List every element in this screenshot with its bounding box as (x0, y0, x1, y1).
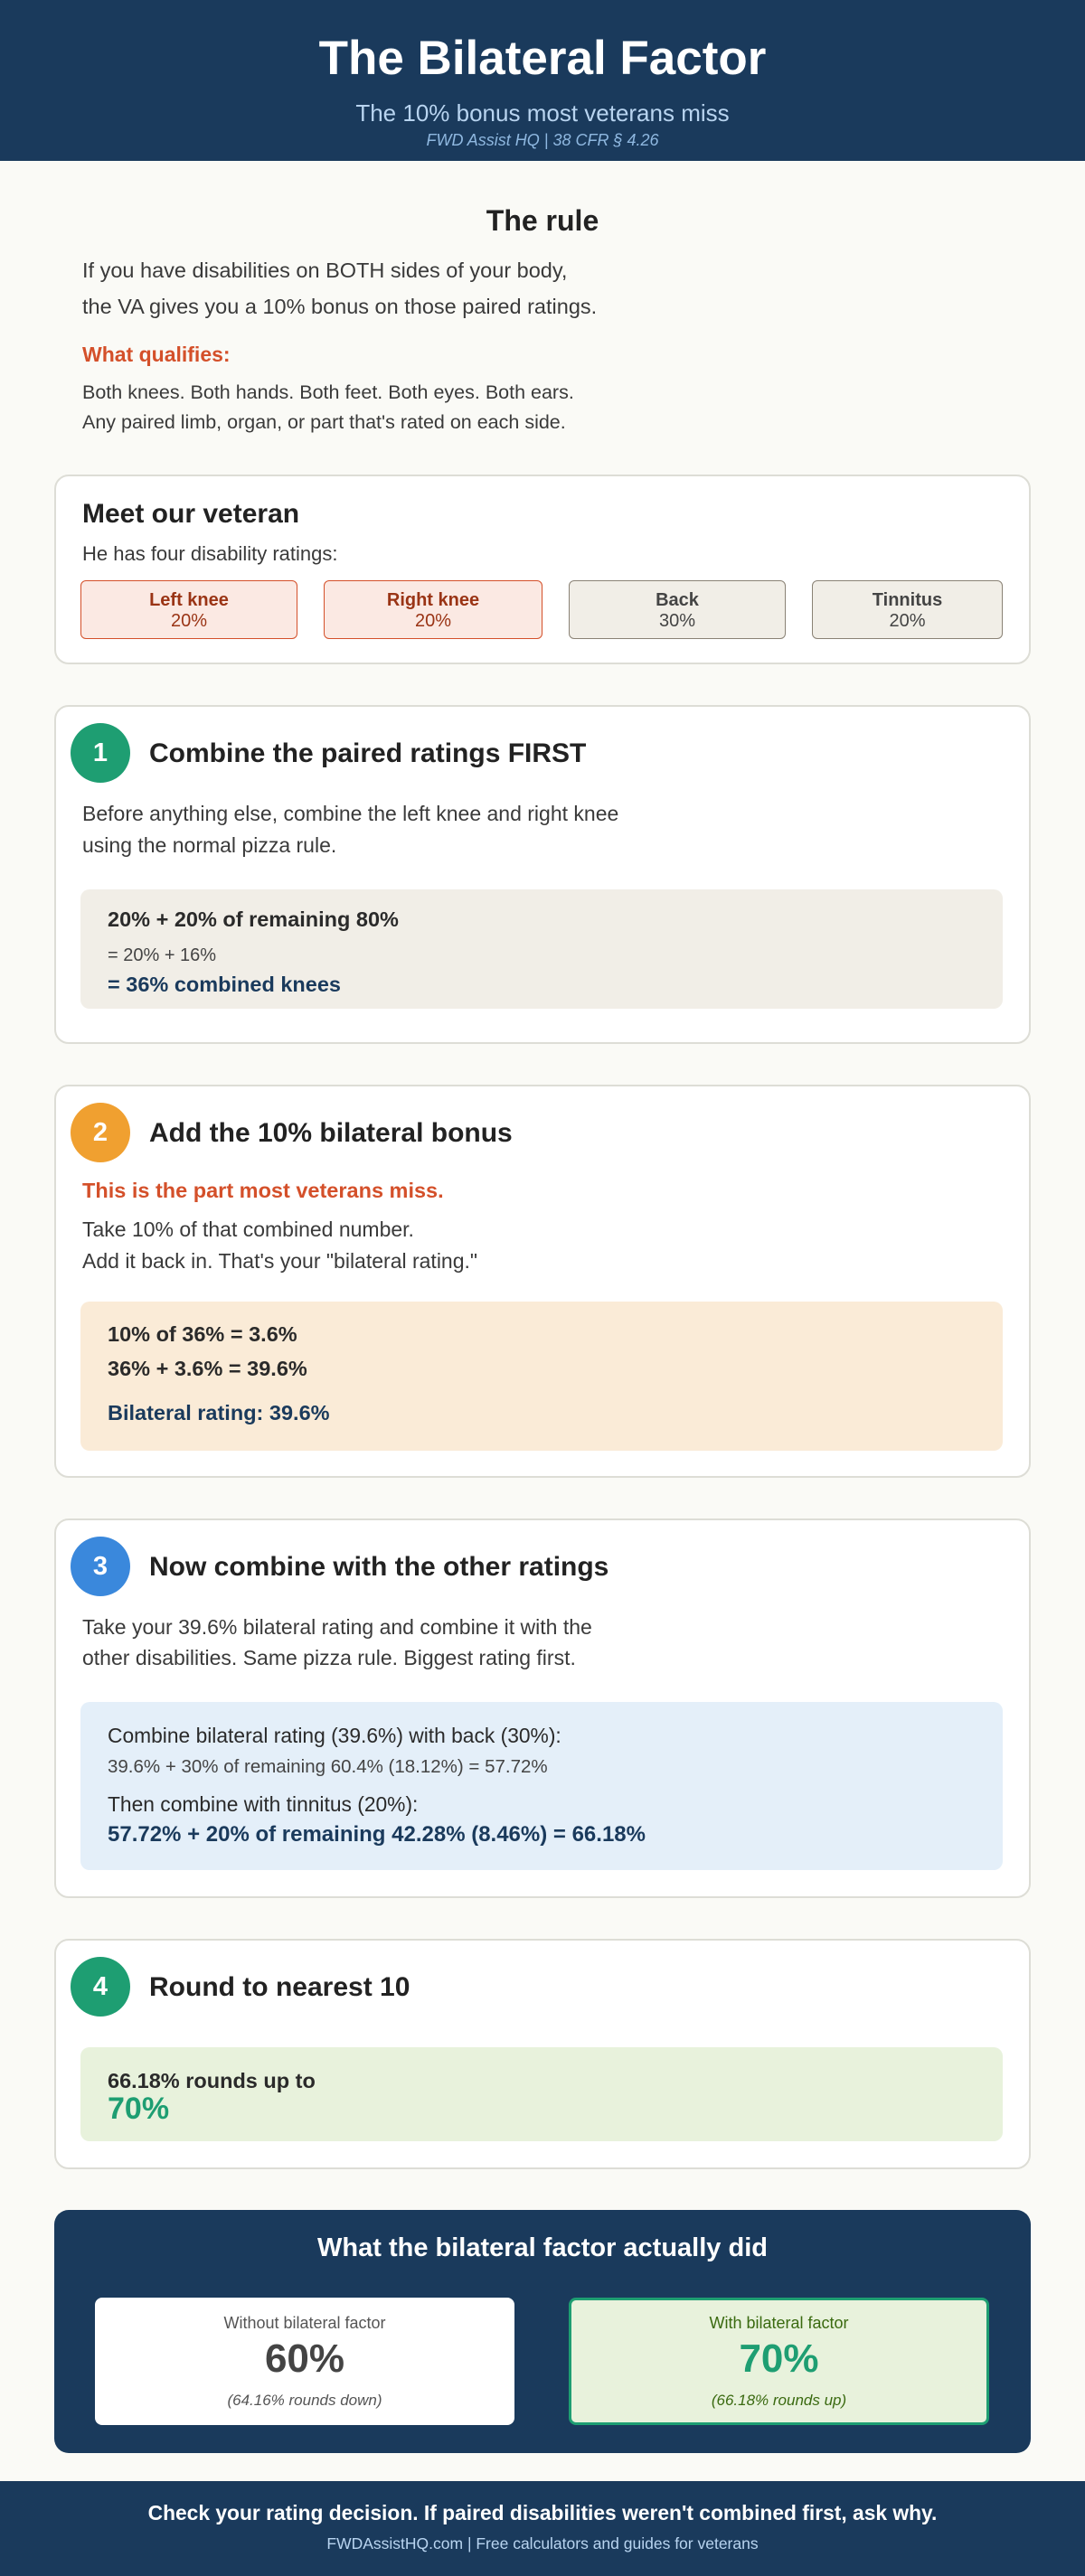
step 4 result box: 70% (108, 2092, 169, 2126)
step 2 text (82, 1217, 477, 1273)
with bilateral: (66.18% rounds up) (712, 2392, 846, 2409)
without bilateral: (64.16% rounds down) (227, 2392, 382, 2409)
with bilateral: 70% (739, 2336, 819, 2381)
footer (0, 2481, 1085, 2576)
panel: step 2 (54, 1085, 1031, 1478)
step 1 calc box: 20% + 20% of remaining 80% (108, 907, 399, 931)
icon: step 1 circle (71, 723, 130, 783)
section: the rule (82, 204, 599, 433)
step 2 calc box: Bilateral rating: 39.6% (108, 1401, 330, 1424)
step 1 text: Before anything else, combine the left knee and right knee (82, 802, 618, 825)
step 3 calc box: 57.72% + 20% of remaining 42.28% (8.46%) = 66.18% (108, 1822, 646, 1847)
what qualifies: What qualifies: (82, 343, 231, 366)
step 2 warning: This is the part most veterans miss. (82, 1179, 444, 1202)
step 1 text (82, 802, 618, 857)
icon: step 4 circle: 4 (93, 1972, 108, 2001)
icon: step 4 circle (71, 1957, 130, 2017)
step 3 calc box: 39.6% + 30% of remaining 60.4% (18.12%) = 57.72% (108, 1756, 548, 1777)
step 2 calc box: 10% of 36% = 3.6% (108, 1322, 297, 1346)
text: He has four disability ratings: (82, 542, 337, 565)
header (0, 0, 1085, 161)
panel: step 1 (54, 705, 1031, 1044)
qualifies text: Any paired limb, organ, or part that's rated on each side. (82, 411, 566, 433)
step 3 calc box (80, 1702, 1003, 1870)
without bilateral: Without bilateral factor (223, 2314, 386, 2332)
rule text: If you have disabilities on BOTH sides of your body, (82, 259, 567, 282)
rating: back: Back (656, 590, 699, 610)
heading: the rule: The rule (486, 204, 599, 237)
step 3 text (82, 1615, 592, 1669)
step 3 heading: Now combine with the other ratings (149, 1552, 609, 1582)
step 2 text: Add it back in. That's your "bilateral rating." (82, 1249, 477, 1273)
step 1 heading: Combine the paired ratings FIRST (149, 738, 586, 768)
with bilateral (569, 2298, 989, 2425)
rating: right knee: Right knee (387, 590, 479, 610)
step 4 result box: 66.18% rounds up to (108, 2069, 316, 2092)
with bilateral: With bilateral factor (709, 2314, 849, 2332)
step 2 calc box (80, 1302, 1003, 1451)
step 1 text: using the normal pizza rule. (82, 833, 336, 857)
step 3 text: Take your 39.6% bilateral rating and combine it with the (82, 1615, 592, 1639)
step 3 calc box: Then combine with tinnitus (20%): (108, 1792, 418, 1816)
source: FWD Assist HQ | 38 CFR § 4.26 (426, 131, 659, 149)
step 4 heading: Round to nearest 10 (149, 1972, 410, 2002)
rating: right knee (324, 580, 542, 639)
step 1 calc box: = 20% + 16% (108, 945, 216, 965)
panel: step 4 (54, 1939, 1031, 2169)
panel: summary (54, 2210, 1031, 2453)
panel: meet our veteran (54, 475, 1031, 664)
summary heading: What the bilateral factor actually did (317, 2233, 768, 2262)
rating: left knee: Left knee (149, 590, 229, 610)
icon: step 2 circle: 2 (93, 1118, 108, 1147)
step 4 result box (80, 2047, 1003, 2141)
rating: left knee (80, 580, 297, 639)
icon: step 3 circle (71, 1537, 130, 1596)
panel: step 3 (54, 1518, 1031, 1898)
icon: step 2 circle (71, 1103, 130, 1162)
rating: left knee: 20% (171, 611, 207, 631)
step 3 calc box: Combine bilateral rating (39.6%) with back (30%): (108, 1724, 561, 1747)
rating: back: 30% (659, 611, 695, 631)
without bilateral: 60% (265, 2336, 344, 2381)
icon: step 3 circle: 3 (93, 1552, 108, 1581)
icon: step 1 circle: 1 (93, 738, 108, 767)
rating: right knee: 20% (415, 611, 451, 631)
rule text: the VA gives you a 10% bonus on those paired ratings. (82, 295, 597, 318)
footer: Check your rating decision. If paired disabilities weren't combined first, ask why. (148, 2501, 937, 2524)
step 2 calc box: 36% + 3.6% = 39.6% (108, 1357, 307, 1380)
rating: tinnitus: 20% (889, 611, 926, 631)
qualifies text (82, 381, 574, 433)
step 2 text: Take 10% of that combined number. (82, 1217, 414, 1241)
step 1 calc box (80, 889, 1003, 1009)
title: The Bilateral Factor (319, 32, 766, 85)
step 1 calc box: = 36% combined knees (108, 973, 341, 996)
step 2 heading: Add the 10% bilateral bonus (149, 1118, 513, 1148)
rating: tinnitus: Tinnitus (873, 590, 942, 610)
step 3 text: other disabilities. Same pizza rule. Biggest rating first. (82, 1646, 576, 1669)
footer: FWDAssistHQ.com | Free calculators and guides for veterans (326, 2534, 759, 2552)
rule text (82, 259, 597, 318)
qualifies text: Both knees. Both hands. Both feet. Both eyes. Both ears. (82, 381, 574, 403)
rating: tinnitus (812, 580, 1003, 639)
heading: Meet our veteran (82, 499, 299, 529)
without bilateral (95, 2298, 514, 2425)
subtitle: The 10% bonus most veterans miss (355, 99, 730, 127)
rating: back (569, 580, 786, 639)
